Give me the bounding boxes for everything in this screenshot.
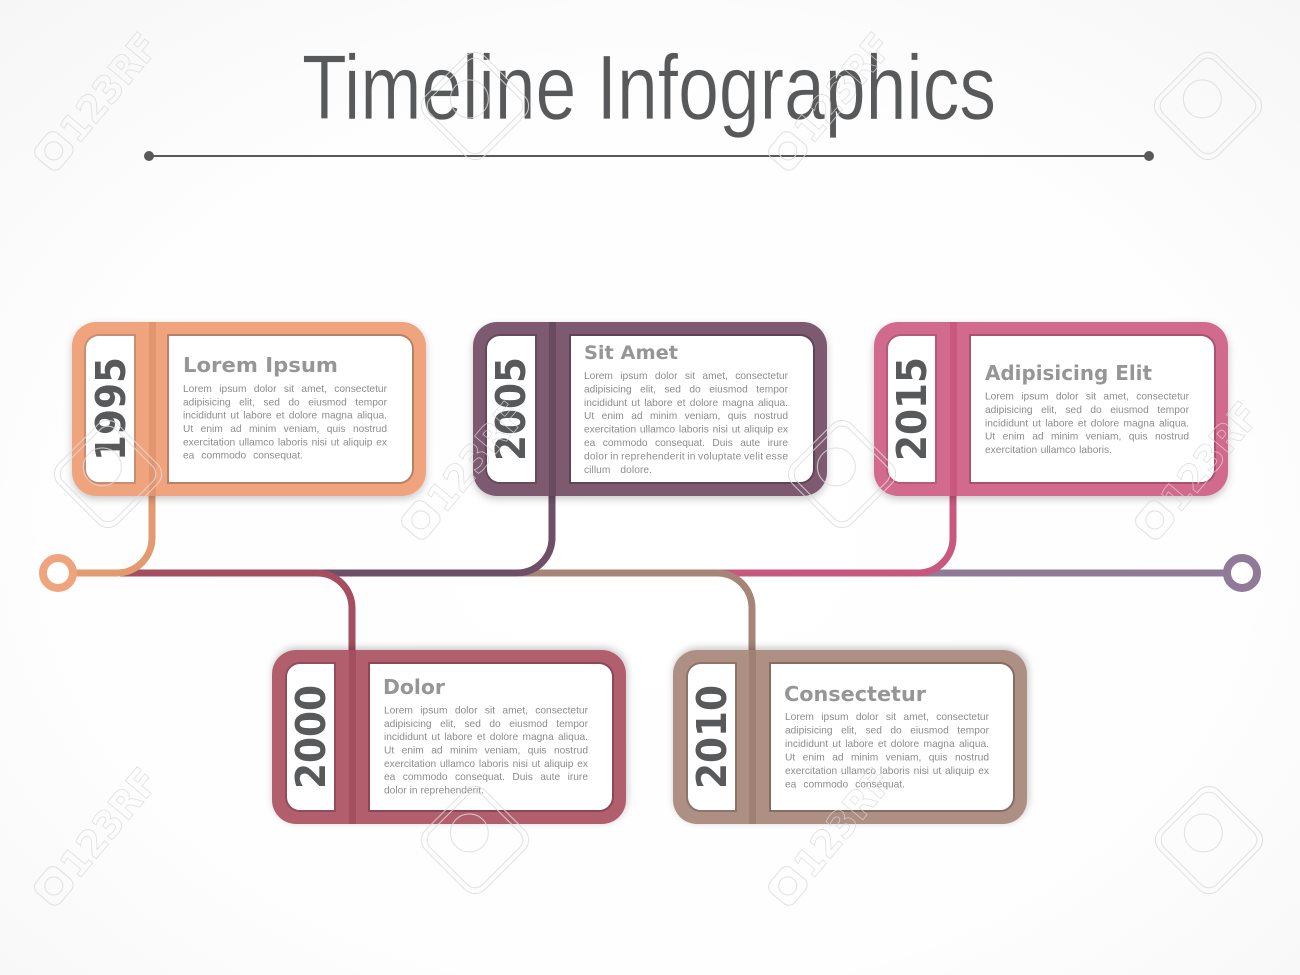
end node: [1227, 558, 1257, 588]
heading: Lorem Ipsum: [183, 353, 338, 377]
segment: purple end: [920, 570, 1225, 576]
body text: adipisicing elit, sed do eiusmod tempor: [785, 726, 990, 736]
year 2010: 2010: [688, 685, 736, 789]
body text: ea commodo consequat. Duis aute irure: [584, 438, 788, 449]
body text: exercitation ullamco laboris nisi ut aliquip ex: [183, 437, 387, 448]
year 1995: 1995: [87, 357, 135, 461]
body text: cillum dolore.: [584, 465, 652, 476]
body text: incididunt ut labore et dolore magna aliqua.: [183, 411, 387, 422]
body text: adipisicing elit, sed do eiusmod tempor: [384, 719, 589, 730]
body text: [384, 706, 589, 796]
watermark overlay: 123RF: [51, 25, 167, 151]
segment: 2015 pink connector: [720, 480, 953, 573]
body text: exercitation ullamco laboris nisi ut aliquip ex: [384, 759, 588, 770]
body text: [985, 392, 1190, 456]
watermark overlay: 123RF: [785, 760, 901, 886]
body text: ea commodo consequat.: [183, 451, 303, 462]
segment: 2000 rose connector: [120, 573, 352, 660]
watermark overlay: 123RF: [418, 394, 534, 520]
body text: ea commodo consequat. Duis aute irure: [384, 772, 588, 783]
segment: 1995 orange connector: [72, 480, 152, 573]
body text: incididunt ut labore et dolore magna aliqua.: [785, 739, 989, 750]
body text: Ut enim ad minim veniam, quis nostrud: [183, 424, 387, 435]
heading: Dolor: [383, 675, 446, 699]
body text: Lorem ipsum dolor sit amet, consectetur: [785, 712, 990, 723]
title: Timeline Infographics: [302, 37, 996, 139]
body text: adipisicing elit, sed do eiusmod tempor: [183, 397, 388, 408]
body text: incididunt ut labore et dolore magna aliqua.: [985, 418, 1189, 429]
body text: [584, 371, 789, 476]
body text: exercitation ullamco laboris.: [985, 445, 1112, 456]
heading: Consectetur: [784, 682, 927, 706]
title divider: [144, 151, 1154, 161]
body text: Lorem ipsum dolor sit amet, consectetur: [985, 392, 1190, 402]
timeline connector lines: [72, 480, 1225, 660]
watermark overlay: 123RF: [785, 25, 901, 151]
year 2005: 2005: [487, 357, 535, 461]
year 2000: 2000: [287, 685, 335, 789]
watermark overlay: 123RF: [1152, 394, 1268, 520]
card: 2015: [874, 322, 1228, 496]
body text: dolor in reprehenderit.: [384, 786, 484, 796]
heading: Adipisicing Elit: [985, 361, 1152, 385]
body text: Lorem ipsum dolor sit amet, consectetur: [584, 371, 789, 382]
body text: [183, 384, 388, 462]
body text: incididunt ut labore et dolore magna aliqua.: [584, 398, 788, 409]
body text: Ut enim ad minim veniam, quis nostrud: [785, 752, 989, 764]
card: 2005: [473, 322, 827, 496]
start node: [43, 558, 73, 588]
body text: incididunt ut labore et dolore magna aliqua.: [384, 732, 588, 743]
card: 1995: [72, 322, 426, 496]
body text: Lorem ipsum dolor sit amet, consectetur: [183, 384, 388, 395]
card: 2000: [272, 650, 626, 824]
body text: adipisicing elit, sed do eiusmod tempor: [584, 384, 789, 395]
body text: Ut enim ad minim veniam, quis nostrud: [985, 432, 1189, 443]
watermark overlay: 123RF: [51, 760, 167, 886]
body text: exercitation ullamco laboris nisi ut aliquip ex: [785, 766, 989, 777]
body text: dolor in reprehenderit in voluptate velit esse: [584, 451, 788, 462]
body text: [785, 712, 990, 790]
body text: exercitation ullamco laboris nisi ut aliquip ex: [584, 425, 788, 436]
card: 2010: [673, 650, 1027, 824]
body text: ea commodo consequat.: [785, 780, 905, 790]
segment: 2010 taupe connector: [520, 573, 752, 660]
body text: adipisicing elit, sed do eiusmod tempor: [985, 405, 1190, 416]
body text: Lorem ipsum dolor sit amet, consectetur: [384, 706, 589, 716]
segment: 2005 plum connector: [320, 480, 552, 573]
body text: Ut enim ad minim veniam, quis nostrud: [384, 746, 588, 756]
year 2015: 2015: [888, 357, 936, 461]
body text: Ut enim ad minim veniam, quis nostrud: [584, 411, 788, 422]
heading: Sit Amet: [584, 342, 678, 364]
